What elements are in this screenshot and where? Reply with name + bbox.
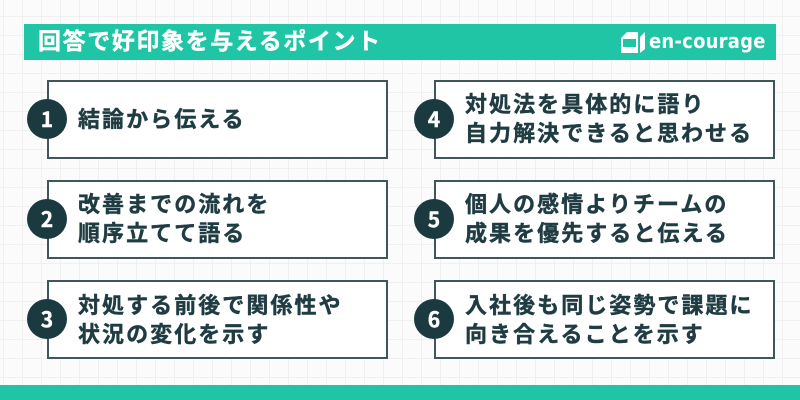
number 1: 1 <box>41 104 53 134</box>
number 4 <box>414 99 454 139</box>
point text: 結論から伝える <box>78 107 246 132</box>
point text <box>465 92 753 146</box>
icon: book <box>621 32 645 53</box>
number 2: 2 <box>41 204 53 234</box>
panel: point 6 <box>414 280 775 359</box>
number 3 <box>27 299 67 339</box>
panel box <box>47 80 388 159</box>
point text: 改善までの流れを <box>78 192 270 217</box>
point text: 向き合えることを示す <box>465 322 705 346</box>
number 5: 5 <box>428 204 440 234</box>
panel: point 2 <box>27 180 388 259</box>
panel: point 4 <box>414 80 775 159</box>
number 6: 6 <box>428 304 440 334</box>
footer band <box>0 385 800 400</box>
number 4: 4 <box>428 104 440 134</box>
logo text: en-courage <box>649 29 766 53</box>
panel: point 5 <box>414 180 775 259</box>
point text: 対処する前後で関係性や <box>78 293 343 318</box>
point text <box>78 293 343 346</box>
point text: 状況の変化を示す <box>78 322 270 346</box>
point text: 対処法を具体的に語り <box>465 92 706 117</box>
point text: 入社後も同じ姿勢で課題に <box>465 293 754 318</box>
panel: point 3 <box>27 280 388 359</box>
point text: 個人の感情よりチームの <box>465 192 728 217</box>
number 6 <box>414 299 454 339</box>
header bar <box>24 24 776 60</box>
panel box <box>434 180 775 259</box>
point text: 順序立てて語る <box>78 220 246 246</box>
panel box <box>47 280 388 359</box>
panel box <box>434 80 775 159</box>
number 5 <box>414 199 454 239</box>
panel box <box>434 280 775 359</box>
title: 回答で好印象を与えるポイント <box>38 28 382 54</box>
point text: 成果を優先すると伝える <box>465 220 729 246</box>
number 1 <box>27 99 67 139</box>
point text <box>465 192 729 246</box>
point text: 自力解決できると思わせる <box>465 120 753 146</box>
number 3: 3 <box>41 304 53 334</box>
point text <box>465 293 754 346</box>
number 2 <box>27 199 67 239</box>
panel: point 1 <box>27 80 388 159</box>
point text <box>78 192 270 246</box>
logo: en-courage <box>621 29 766 53</box>
panel box <box>47 180 388 259</box>
